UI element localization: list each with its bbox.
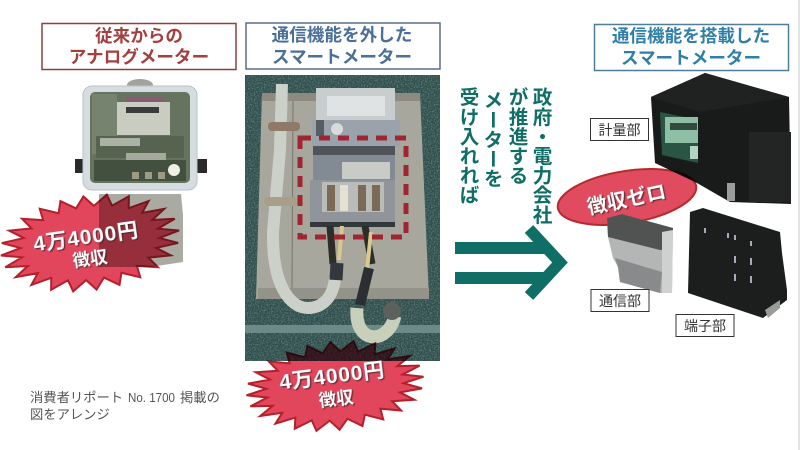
heading: smart meter without communication: スマートメーター xyxy=(272,47,412,67)
heading: smart meter with communication: 通信機能を搭載した xyxy=(612,26,770,46)
vertical text: condition: 受け入れれば xyxy=(456,86,479,205)
vertical text: condition: メーターを xyxy=(480,90,502,188)
source note: 掲載の xyxy=(180,390,220,405)
heading: smart meter without communication: 通信機能を外した xyxy=(272,25,412,45)
arrow: double arrow to right xyxy=(455,229,560,296)
callout: zero charge xyxy=(554,160,700,234)
label: communication unit xyxy=(591,290,649,312)
heading: smart meter with communication: スマートメーター xyxy=(621,48,761,68)
label: communication unit: 通信部 xyxy=(599,293,641,309)
heading: smart meter without communication xyxy=(246,23,440,69)
heading: smart meter with communication xyxy=(594,24,788,70)
vertical text: condition: 政府・電力会社 xyxy=(529,87,552,224)
callout: charge on smart meter without communication: 徴収 xyxy=(318,387,355,411)
diagram: metering unit xyxy=(651,73,791,204)
heading: analog meter xyxy=(42,24,236,70)
vertical text: condition xyxy=(456,86,552,224)
label: metering unit: 計量部 xyxy=(598,122,640,138)
highlight: dashed red frame xyxy=(300,138,406,237)
callout: charge on analog meter xyxy=(0,184,186,302)
source note: 消費者リポート xyxy=(30,390,123,405)
source note: 図をアレンジ xyxy=(30,407,110,422)
source note xyxy=(30,390,220,422)
vertical text: condition: が推進する xyxy=(505,86,528,185)
label: terminal unit xyxy=(676,314,734,336)
callout: charge on smart meter without communication xyxy=(242,333,428,439)
label: terminal unit: 端子部 xyxy=(684,318,726,334)
diagram: terminal unit xyxy=(688,208,787,318)
callout: charge on smart meter without communication: 4万4000円 xyxy=(278,359,386,394)
label: metering unit xyxy=(590,118,648,140)
callout: charge on analog meter: 4万4000円 xyxy=(32,219,140,256)
photo: analog meter xyxy=(75,79,207,267)
heading: analog meter: 従来からの xyxy=(95,26,183,46)
source note: No. 1700 xyxy=(128,390,175,405)
callout: charge on analog meter: 徴収 xyxy=(71,247,109,271)
photo: installed smart meter without communication unit xyxy=(245,75,440,361)
heading: analog meter: アナログメーター xyxy=(69,47,209,67)
callout: zero charge: 徴収ゼロ xyxy=(585,179,668,219)
diagram: communication unit xyxy=(607,214,673,293)
